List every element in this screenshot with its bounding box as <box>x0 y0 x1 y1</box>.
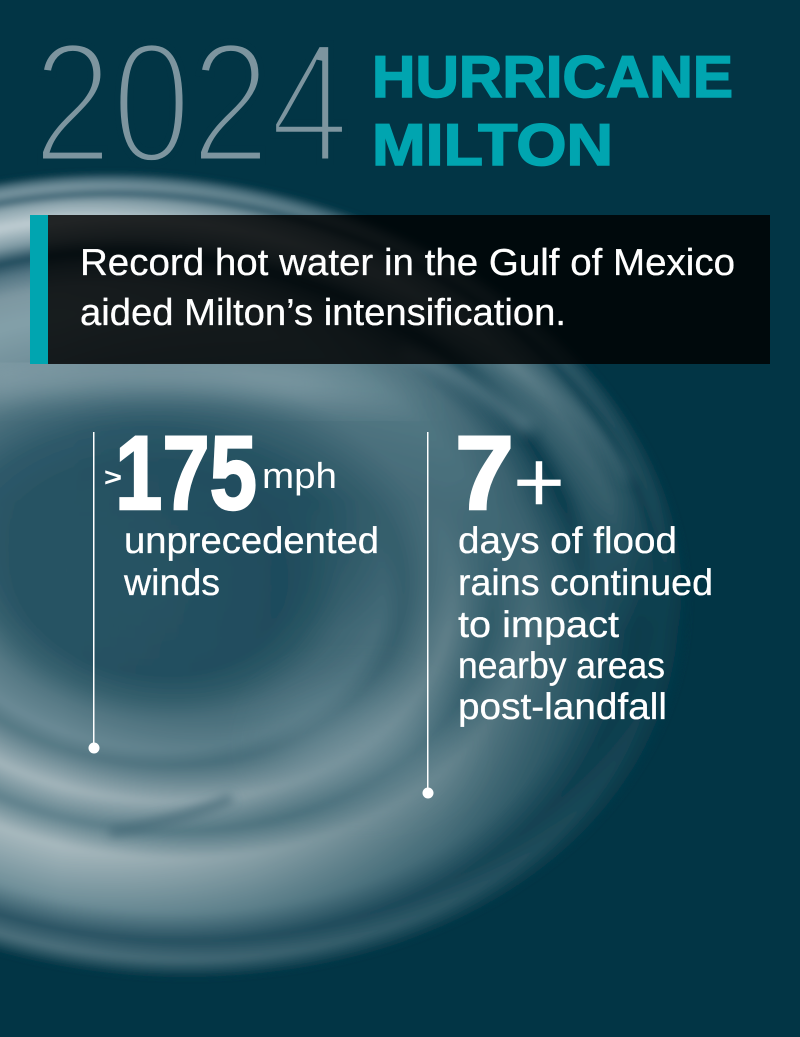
days figure: + <box>513 432 565 531</box>
stat: flood rain days <box>422 415 713 798</box>
days description: to impact <box>458 604 620 645</box>
title: Hurricane Milton <box>372 44 733 178</box>
swirl streaks <box>270 695 450 795</box>
title: Hurricane Milton: HURRICANE <box>372 44 733 110</box>
title: Hurricane Milton: MILTON <box>372 112 613 178</box>
wind figure: mph <box>262 455 337 496</box>
days description: nearby areas <box>458 645 665 686</box>
leader line with dot <box>88 432 100 754</box>
teal accent bar <box>30 215 48 364</box>
days description: rains continued <box>458 562 713 603</box>
panel background <box>30 215 770 364</box>
wind description <box>123 520 379 603</box>
wind description: unprecedented <box>124 520 379 561</box>
year: 2024: 2024 <box>33 7 349 199</box>
headline text <box>80 241 735 333</box>
wind figure: 175 <box>115 415 257 532</box>
days description: days of flood <box>458 520 677 561</box>
wind figure: > <box>104 462 122 492</box>
background: dark teal with hurricane swirl <box>0 171 682 977</box>
wind description: winds <box>123 562 220 603</box>
days description: post-landfall <box>458 686 667 727</box>
leader line with dot <box>422 432 434 798</box>
stat: wind speed <box>88 415 379 754</box>
days description <box>458 520 713 727</box>
headline text: aided Milton’s intensification. <box>80 291 566 333</box>
days figure: 7 <box>455 415 514 532</box>
days figure <box>455 415 565 532</box>
panel: headline callout <box>30 215 770 364</box>
headline text: Record hot water in the Gulf of Mexico <box>80 241 735 283</box>
